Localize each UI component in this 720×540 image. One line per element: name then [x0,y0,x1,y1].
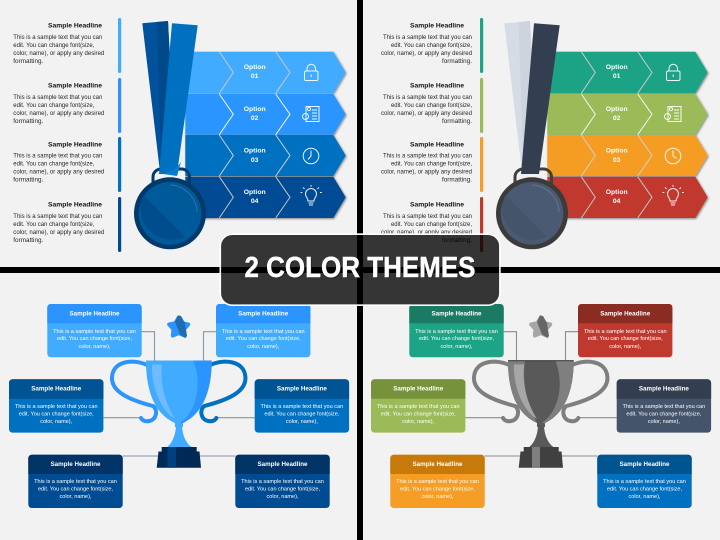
panel: trophy blue theme [0,273,357,540]
accent bars [118,18,121,252]
icon: document [302,106,319,122]
box 4: This is a sample text that you can [261,404,343,410]
medal: bail ring [153,169,190,191]
icon: light bulb [662,185,684,205]
box 6: This is a sample text that you can [603,479,686,485]
panel: medal colour theme [363,0,720,267]
option labels: 02 [251,115,259,122]
text block 3: Sample Headline [410,141,464,148]
box 3: color, name), [402,419,435,425]
box 5: This is a sample text that you can [34,479,117,485]
box 3: color, name), [40,419,73,425]
text block 1: This is a sample text that you can [383,34,472,41]
box 5: color, name), [422,494,454,500]
text block 4: edit. You can change font(size, [13,221,95,228]
text block 3: edit. You can change font(size, [391,161,472,168]
option labels [244,64,266,205]
box 6: edit. You can change font(size, [245,486,320,492]
text block 4 [381,201,472,244]
text block 1: edit. You can change font(size, [391,42,472,49]
text block 2: edit. You can change font(size, [13,102,95,109]
text block 4: edit. You can change font(size, [391,221,472,228]
banner: 2 color themes [220,234,500,305]
chevron row 3 [547,135,708,176]
option labels: 01 [613,73,621,80]
icon: lock [666,64,680,80]
box 3: This is a sample text that you can [15,404,98,410]
text block 2: color, name), or apply any desired [13,110,105,117]
connector lines [103,332,255,456]
text block 1 [381,23,472,65]
option labels: Option [606,106,628,113]
text block 2: edit. You can change font(size, [391,102,472,109]
box 3 [371,379,465,433]
text block 4: This is a sample text that you can [13,213,103,220]
box 2: This is a sample text that you can [584,329,667,335]
box 1: This is a sample text that you can [53,329,136,335]
text block 4: formatting. [442,237,472,244]
box 1: This is a sample text that you can [415,329,498,335]
text block 4: Sample Headline [410,201,464,208]
box 1: color, name), [78,344,111,350]
box 5: edit. You can change font(size, [400,486,475,492]
box 2: color, name), [609,344,642,350]
medal: disc [134,177,206,249]
box 4: color, name), [648,419,680,425]
text block 3: This is a sample text that you can [13,153,103,160]
box 6: edit. You can change font(size, [607,486,682,492]
chevron row 3 [185,135,346,176]
option labels: 04 [251,198,259,205]
box 4: Sample Headline [639,386,689,392]
option labels: 02 [613,115,621,122]
text block 2 [381,82,472,125]
text block 1 [13,23,105,65]
box 2: edit. You can change font(size, [226,336,301,342]
accent bars [480,18,483,252]
medal: ribbons [504,21,560,174]
option labels: Option [606,189,628,196]
box 1: Sample Headline [432,310,482,318]
icon: clock [303,148,319,164]
box 1 [47,304,142,357]
text block 2: formatting. [442,118,472,125]
text block 4: color, name), or apply any desired [13,229,105,236]
option labels [606,64,628,205]
box 5: edit. You can change font(size, [38,486,113,492]
box 6: color, name), [266,494,299,500]
icon: light bulb [300,185,322,205]
option labels: Option [244,189,266,196]
text block 4: color, name), or apply any desired [381,229,472,236]
chevron row 4 [185,177,346,218]
text block 3: color, name), or apply any desired [13,169,105,176]
box 1: edit. You can change font(size, [419,336,494,342]
box 5: Sample Headline [412,461,463,468]
text block 1: This is a sample text that you can [13,34,103,41]
box 4: edit. You can change font(size, [626,411,702,417]
trophy [474,360,607,468]
banner: 2 color themes: 2 COLOR THEMES [244,252,476,284]
box 6 [597,455,692,508]
text block 3: color, name), or apply any desired [381,169,472,176]
box 2 [216,304,310,357]
box 3: edit. You can change font(size, [381,411,456,417]
text block 3: Sample Headline [48,141,102,148]
panel: trophy colour theme [363,273,720,540]
text block 1: Sample Headline [410,23,464,30]
text block 1: Sample Headline [48,23,102,30]
text block 3: This is a sample text that you can [383,153,472,160]
chevron row 2 [185,94,346,135]
medal: ribbons [142,21,198,176]
chevron row 1 [185,52,346,93]
box 2: Sample Headline [600,310,651,318]
icon: star [169,316,188,338]
box 1 [409,304,504,357]
text block 4: formatting. [13,237,44,244]
box 3: edit. You can change font(size, [19,411,94,417]
text block 3 [13,141,105,184]
box 5 [28,455,123,508]
text block 4 [13,201,105,244]
option labels: Option [244,64,266,71]
banner: 2 color themes: 2 COLOR THEMES [246,253,476,285]
text block 1: color, name), or apply any desired [13,50,105,57]
box 1: edit. You can change font(size, [57,336,132,342]
box 2: Sample Headline [238,310,289,318]
option labels: 03 [613,157,621,164]
box 1: color, name), [440,344,473,350]
text block 4: This is a sample text that you can [383,213,472,220]
medal: bail ring [515,169,552,191]
option labels: Option [606,64,628,71]
option labels: Option [244,148,266,154]
option labels: Option [244,106,266,113]
box 6: Sample Headline [258,461,308,468]
box 2 [578,304,672,357]
box 5: This is a sample text that you can [396,479,479,485]
text block 2: This is a sample text that you can [13,94,103,101]
connector lines [465,332,617,456]
trophy [112,360,245,468]
text block 4: Sample Headline [48,201,102,208]
box 4: edit. You can change font(size, [264,411,340,417]
text block 2: Sample Headline [410,82,464,89]
box 6 [235,455,330,508]
box 2: color, name), [247,344,280,350]
option labels: 01 [251,73,259,80]
text block 1: formatting. [442,58,472,65]
icon: lock [304,64,318,80]
box 3: Sample Headline [393,386,444,392]
box 5: Sample Headline [50,461,101,468]
box 5: color, name), [60,494,92,500]
box 6: Sample Headline [620,461,670,468]
text block 3: formatting. [13,177,44,184]
box 4: color, name), [286,419,318,425]
box 1: Sample Headline [70,310,120,318]
chevron row 2 [547,94,708,135]
text block 1: color, name), or apply any desired [381,50,472,57]
box 6: color, name), [628,494,661,500]
box 4: Sample Headline [277,386,327,392]
text block 3: formatting. [442,177,472,184]
option labels: Option [606,148,628,154]
text block 3: edit. You can change font(size, [13,161,95,168]
option labels: 03 [251,157,259,164]
box 4 [617,379,711,433]
chevron row 4 [547,177,708,218]
box 3: This is a sample text that you can [377,404,460,410]
box 4: This is a sample text that you can [623,404,705,410]
box 2: edit. You can change font(size, [588,336,663,342]
option labels: 04 [613,198,621,205]
text block 2: color, name), or apply any desired [381,110,472,117]
chevron row 1 [547,52,708,93]
text block 2: This is a sample text that you can [383,94,472,101]
icon: document [664,106,681,122]
icon: star [531,316,550,338]
box 5 [390,455,485,508]
text block 1: formatting. [13,58,44,65]
medal: disc [496,177,568,249]
text block 1: edit. You can change font(size, [13,42,95,49]
text block 2 [13,82,105,125]
box 3: Sample Headline [31,386,82,392]
text block 3 [381,141,472,184]
box 4 [255,379,349,433]
panel: medal blue theme [0,0,357,267]
box 3 [9,379,103,433]
text block 2: Sample Headline [48,82,102,89]
box 6: This is a sample text that you can [241,479,324,485]
text block 2: formatting. [13,118,44,125]
box 2: This is a sample text that you can [222,329,305,335]
icon: clock [665,148,681,164]
